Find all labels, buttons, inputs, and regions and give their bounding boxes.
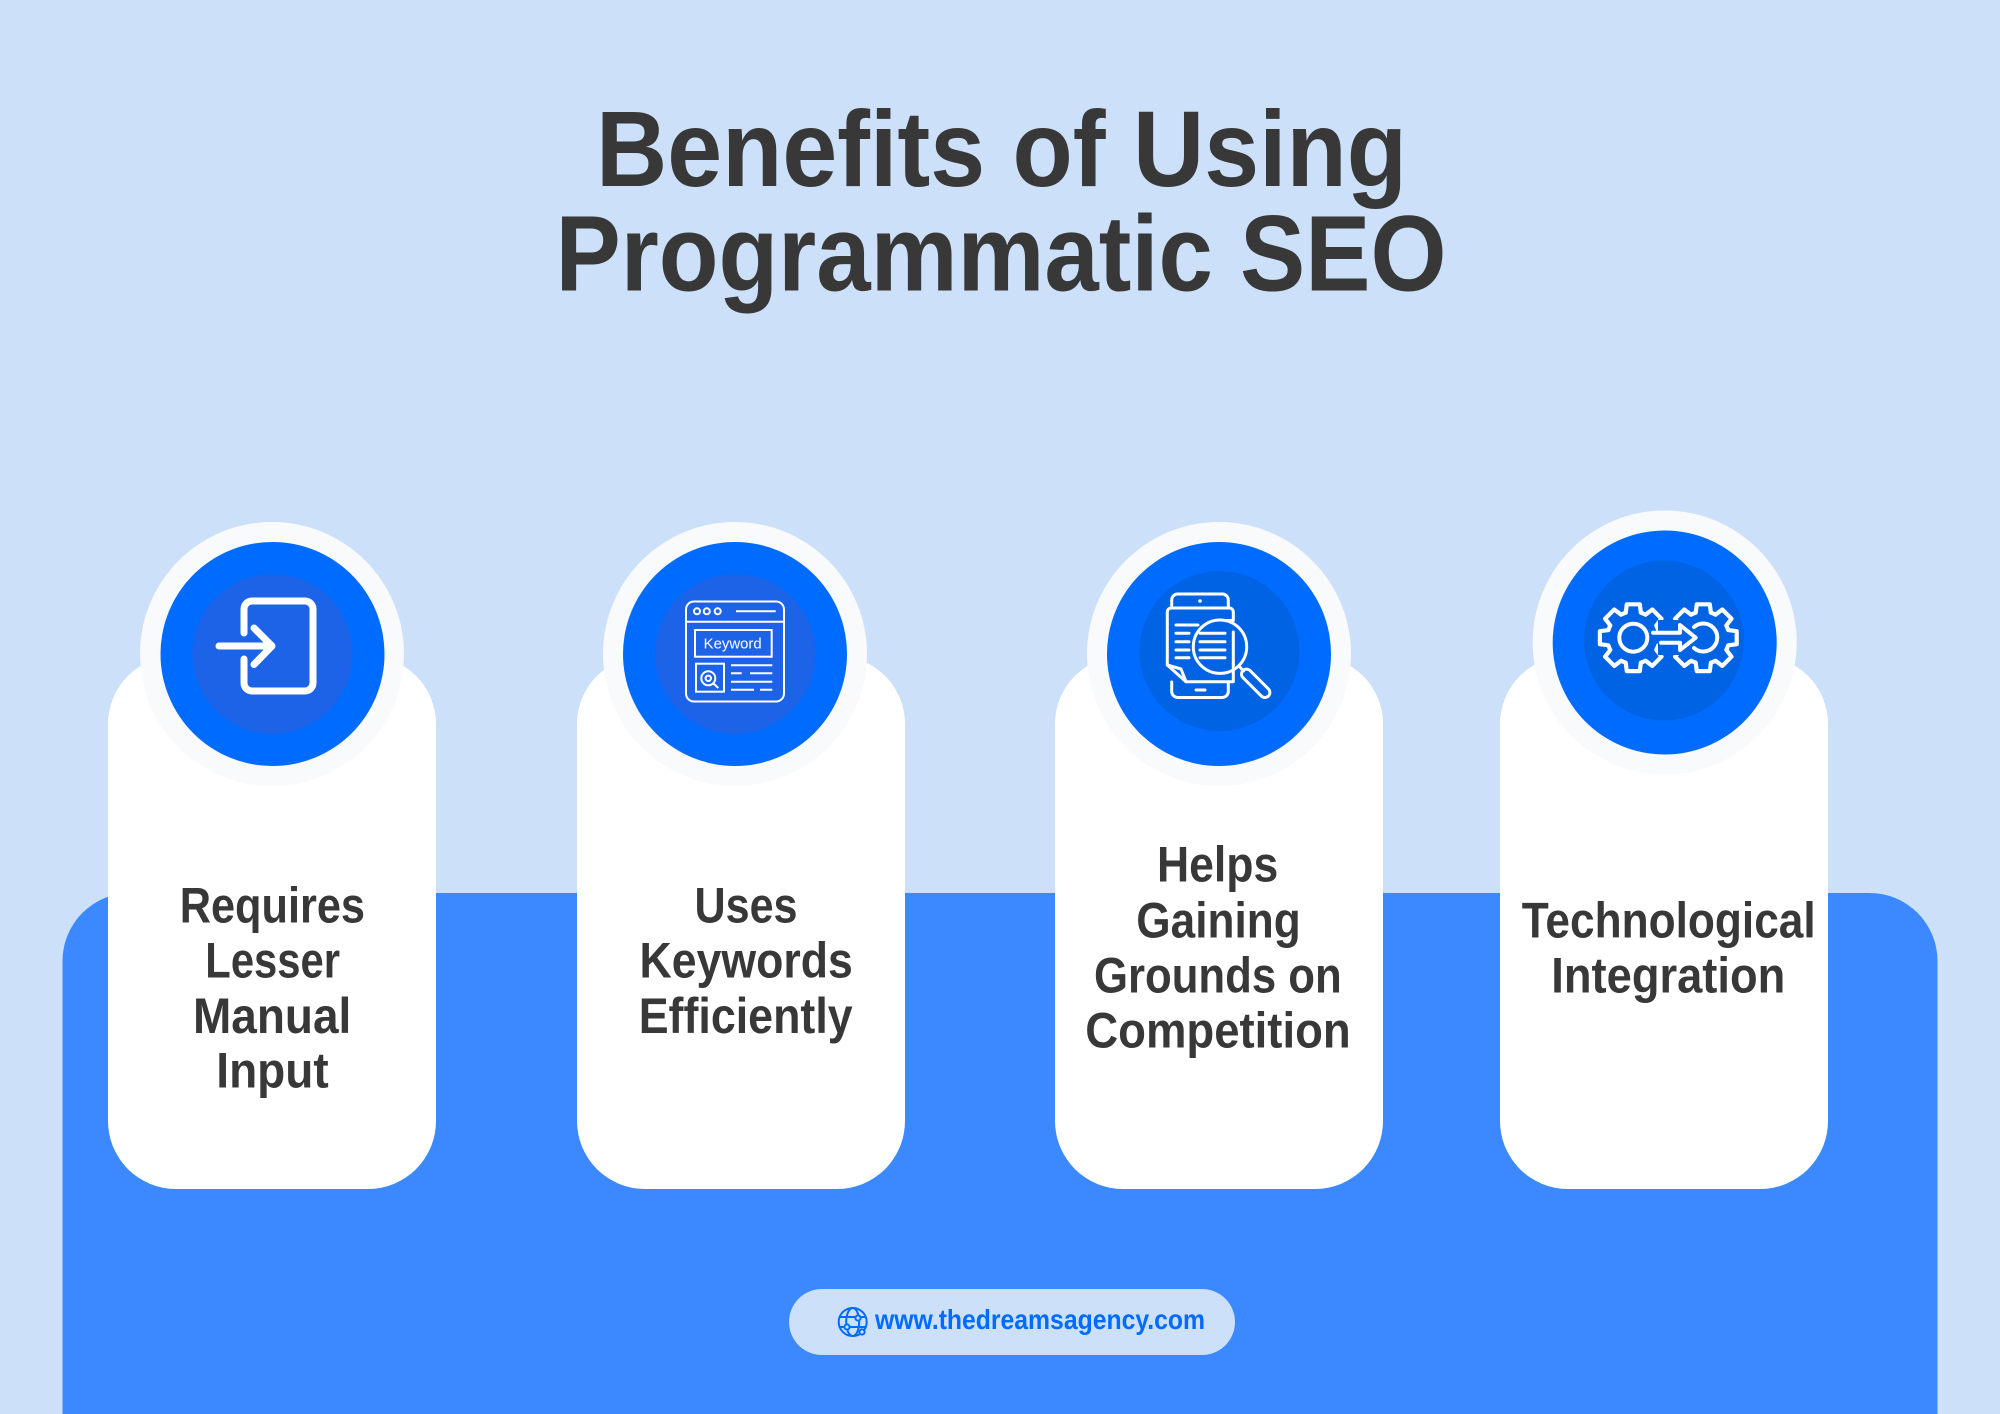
card 1 background [108, 656, 436, 1189]
icon: keyword browser window: Keyword [704, 636, 762, 652]
icon: keyword browser window [603, 522, 867, 786]
panel: card 4 technological integration [1500, 510, 1828, 1189]
card 1 text: Manual [193, 988, 351, 1044]
card 3 text: Helps [1157, 837, 1278, 893]
card 2 text: Efficiently [639, 988, 853, 1044]
card 1 text: Lesser [205, 933, 340, 989]
website text: www.thedreamsagency.com [874, 1304, 1205, 1335]
card 4 background [1500, 656, 1828, 1189]
card 3 text: Competition [1085, 1002, 1351, 1058]
card 2 text [639, 878, 853, 1044]
card 1 text [180, 878, 365, 1099]
panel: blue background [62, 893, 1938, 1414]
panel: card 3 helps gaining grounds [1055, 522, 1383, 1189]
card 1 text: Input [216, 1043, 329, 1099]
card 3 text: Grounds on [1094, 948, 1342, 1004]
icon: sign in arrow [140, 522, 404, 786]
title: Programmatic SEO [556, 193, 1446, 314]
icon: phone document magnifier [1087, 522, 1351, 786]
card 2 text: Keywords [640, 933, 853, 989]
title [556, 88, 1446, 314]
card 1 text: Requires [180, 878, 365, 934]
panel: card 2 uses keywords efficiently [577, 522, 905, 1189]
card 3 text [1085, 837, 1351, 1058]
card 2 background [577, 656, 905, 1189]
icon: two gears with arrow [1533, 510, 1797, 774]
icon: globe [839, 1308, 867, 1336]
card 4 text [1522, 892, 1816, 1004]
website pill [789, 1289, 1235, 1355]
card 4 text: Integration [1551, 948, 1785, 1004]
title: Benefits of Using [596, 88, 1407, 209]
panel: card 1 requires lesser manual input [108, 522, 436, 1189]
card 3 text: Gaining [1136, 892, 1301, 948]
card 4 text: Technological [1522, 892, 1816, 948]
card 2 text: Uses [694, 878, 798, 934]
card 3 background [1055, 656, 1383, 1189]
